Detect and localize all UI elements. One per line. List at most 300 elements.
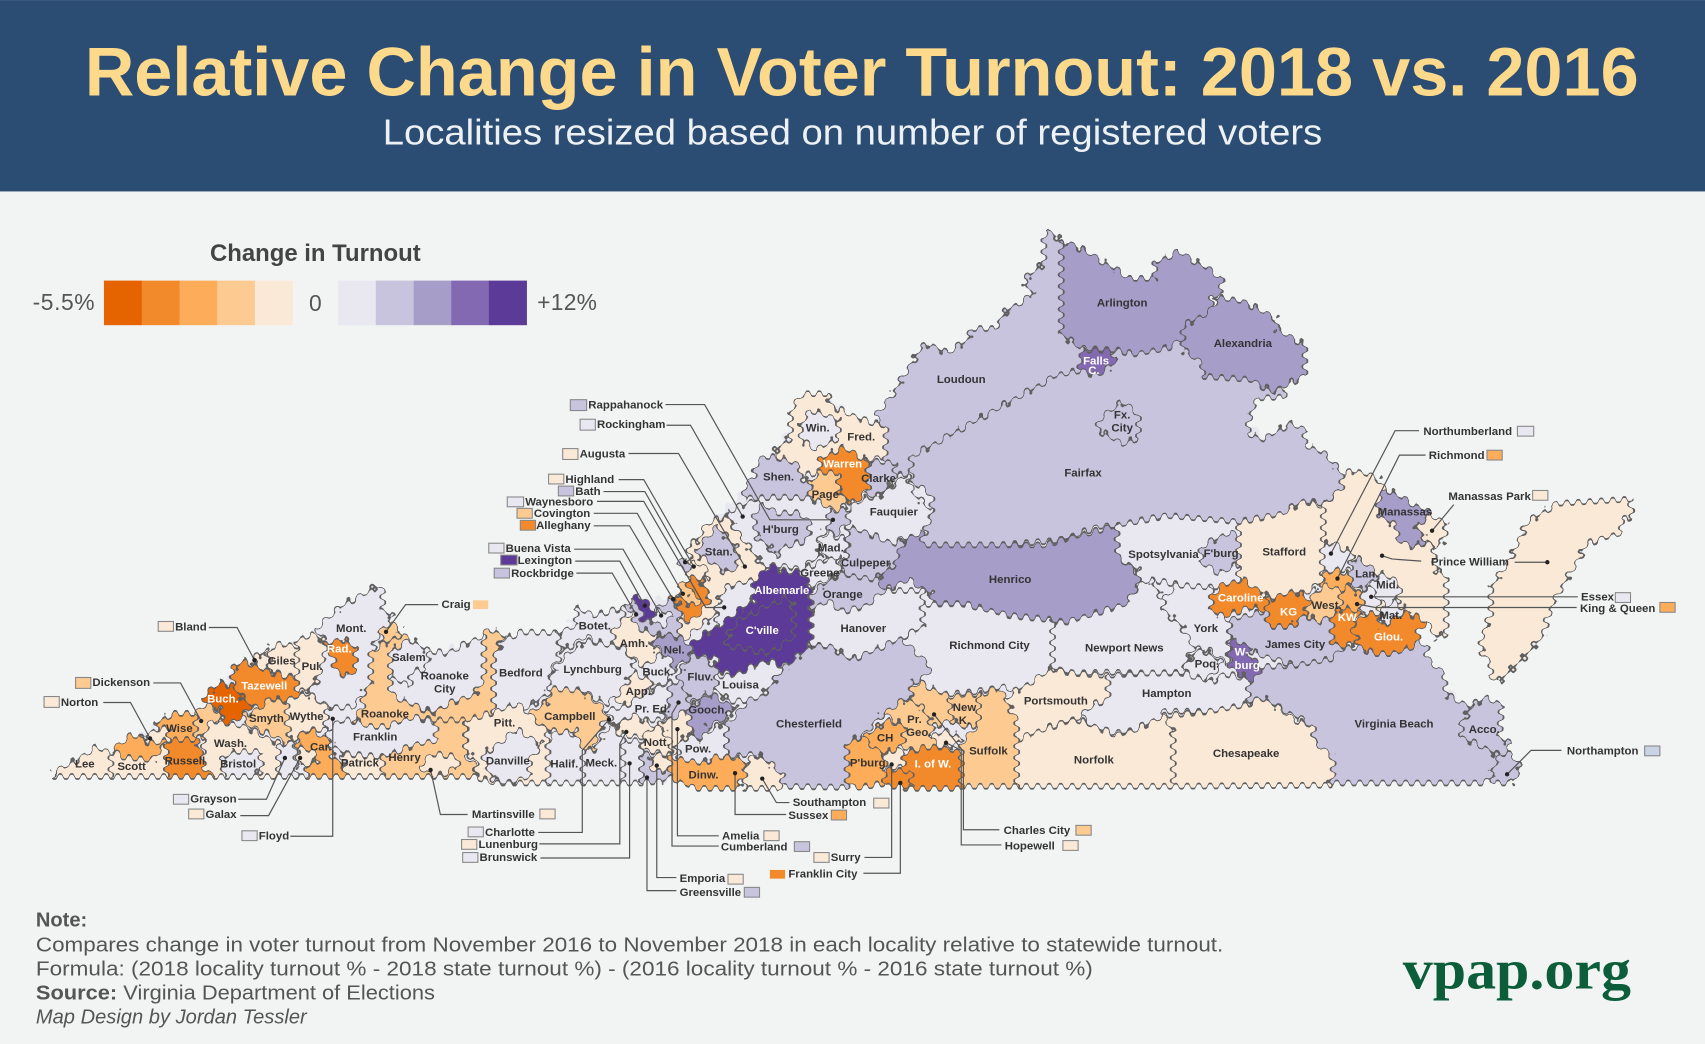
callout: Martinsville: Martinsville — [472, 809, 535, 821]
region name labels: Newport News — [1085, 642, 1164, 654]
callout: Waynesboro: Waynesboro — [525, 497, 593, 509]
region: Lee — [53, 747, 111, 776]
callout: Charlotte — [468, 717, 611, 839]
region: Middlesex — [1368, 573, 1401, 607]
callout: Franklin City — [770, 781, 903, 881]
region name labels: Fx. — [1114, 410, 1130, 422]
legend: change in turnout: 0 — [309, 290, 322, 316]
region: Augusta — [679, 515, 763, 644]
header banner — [0, 0, 1705, 191]
region: Surry — [885, 747, 905, 769]
region: Fairfax — [911, 338, 1342, 545]
legend: change in turnout: +12% — [537, 289, 597, 315]
region: Frederick — [772, 394, 886, 476]
region name labels: C. — [1088, 365, 1100, 377]
region: Nelson — [651, 633, 690, 670]
region name labels: Glou. — [1374, 632, 1403, 644]
region name labels: Pitt. — [494, 717, 515, 729]
callout: Lexington: Lexington — [518, 555, 572, 567]
callout: Essex: Essex — [1581, 591, 1615, 603]
region: Fredericksburg — [1200, 532, 1248, 573]
region name labels: Fairfax — [1064, 467, 1102, 479]
region name labels: Alexandria — [1214, 338, 1273, 350]
region: Galax — [297, 747, 318, 767]
region name labels: Richmond City — [949, 640, 1030, 652]
region name labels: Arlington — [1097, 298, 1148, 310]
region name labels: Shen. — [763, 472, 794, 484]
region name labels: Page — [812, 489, 839, 501]
region: Greene — [800, 557, 839, 587]
region: Page — [810, 472, 848, 513]
region name labels: H'burg — [763, 524, 799, 536]
region name labels: Fred. — [847, 431, 875, 443]
region: Roanoke — [354, 629, 503, 726]
callout: Rockbridge: Rockbridge — [511, 568, 574, 580]
region name labels: Salem — [392, 652, 426, 664]
region name labels: City — [434, 684, 456, 696]
region name labels: Pr. — [907, 714, 922, 726]
region: Manassas Park — [1416, 515, 1446, 547]
callout: Rockingham — [580, 419, 745, 519]
region name labels: Chesterfield — [776, 719, 842, 731]
region: Mecklenburg — [583, 726, 623, 783]
region: Buckingham — [644, 654, 673, 687]
region name labels: Buck. — [642, 666, 673, 678]
region name labels: Chesapeake — [1213, 748, 1279, 760]
region name labels: Dinw. — [689, 770, 719, 782]
region name labels: KW — [1338, 612, 1357, 624]
callout: Lexington — [501, 555, 647, 608]
region: Nottoway — [642, 725, 672, 755]
callout: Brunswick — [463, 761, 632, 864]
region: Lunenburg — [613, 713, 654, 737]
callout: Northumberland: Northumberland — [1423, 426, 1512, 438]
region name labels: Loudoun — [937, 374, 986, 386]
callout: Galax: Galax — [206, 809, 237, 821]
region name labels: Wise — [166, 723, 193, 735]
region: Prince George — [884, 698, 943, 750]
callout: Northumberland — [1329, 426, 1534, 556]
region name labels: Rad. — [327, 643, 352, 655]
region: Louisa — [717, 660, 783, 701]
region name labels: Henry — [388, 752, 421, 764]
region: Fairfax City — [1098, 402, 1138, 445]
region: Lynchburg — [548, 641, 634, 705]
region: Russell — [166, 739, 214, 776]
region: Chesterfield — [726, 638, 932, 787]
region: Greensville — [642, 754, 670, 782]
footnote: Formula: (2018 locality turnout % - 2018 state turnout %) - (2016 locality turnout % - 2016 state turnout %) — [36, 958, 1093, 980]
region name labels: Wythe — [290, 711, 324, 723]
region name labels: Mad. — [818, 542, 844, 554]
footnote — [36, 910, 1223, 1028]
callout: Greensville: Greensville — [680, 887, 741, 899]
callout: Manassas Park — [1430, 490, 1548, 533]
callout: Floyd — [242, 717, 335, 843]
region name labels — [75, 298, 1500, 782]
region name labels: Nel. — [664, 645, 685, 657]
region name labels: Amh. — [620, 638, 648, 650]
region: Caroline — [1211, 580, 1268, 617]
callout: Emporia: Emporia — [680, 873, 726, 885]
region name labels: Win. — [806, 423, 830, 435]
region name labels: Meck. — [585, 758, 617, 770]
region: Henrico — [875, 525, 1138, 622]
region: Isle of Wight — [903, 747, 961, 788]
callout: Grayson: Grayson — [190, 794, 237, 806]
region name labels: Lynchburg — [563, 664, 622, 676]
callout: Covington — [517, 508, 685, 596]
callout: Prince William — [1380, 554, 1550, 568]
region: Craig — [381, 622, 401, 644]
region: Southampton — [745, 754, 783, 788]
region: Colonial Heights — [864, 720, 905, 755]
region: Fluvanna — [679, 655, 717, 704]
footnote: Source: Virginia Department of Elections — [36, 982, 435, 1004]
callout: Northampton: Northampton — [1567, 746, 1639, 758]
region: Shenandoah — [744, 456, 810, 498]
region: York — [1163, 585, 1230, 663]
region name labels: Norfolk — [1074, 754, 1115, 766]
region: Emporia — [650, 753, 670, 772]
callout: Norton: Norton — [61, 697, 98, 709]
region name labels: Roanoke — [421, 671, 469, 683]
region name labels: burg — [1235, 660, 1260, 672]
callout: Sussex — [733, 771, 847, 822]
region name labels: Clarke — [861, 473, 896, 485]
callout: Martinsville — [428, 768, 555, 821]
region name labels: KG — [1280, 607, 1297, 619]
region: Waynesboro — [717, 580, 754, 626]
callout: Grayson — [173, 756, 287, 806]
region name labels: West. — [1311, 600, 1342, 612]
region name labels: Bristol — [220, 759, 256, 771]
callout: Buena Vista — [489, 543, 663, 618]
region: Wise — [111, 713, 196, 760]
callout: Alleghany: Alleghany — [536, 520, 591, 532]
callout: Charles City: Charles City — [1004, 825, 1071, 837]
region: Pittsylvania — [465, 704, 549, 783]
region name labels: Fluv. — [687, 672, 713, 684]
region name labels: Buch. — [207, 694, 239, 706]
callout: Craig — [384, 599, 488, 634]
title: Relative Change in Voter Turnout: 2018 vs. 2016 — [85, 34, 1639, 111]
region name labels: Stafford — [1262, 547, 1306, 559]
callout: Bath: Bath — [575, 486, 601, 498]
callout: Buena Vista: Buena Vista — [506, 543, 571, 555]
region name labels: Pow. — [685, 744, 711, 756]
region name labels: Portsmouth — [1024, 696, 1088, 708]
region: Rockbridge — [623, 597, 680, 641]
region name labels: Pr. Ed. — [635, 703, 670, 715]
region name labels: Fauquier — [870, 506, 918, 518]
region: Newport News — [1053, 580, 1194, 673]
region: King and Queen — [1341, 585, 1362, 613]
callout: Hopewell: Hopewell — [1005, 840, 1055, 852]
footnote: Note: — [36, 910, 87, 932]
region name labels: Hampton — [1142, 688, 1191, 700]
region name labels: Roanoke — [361, 709, 409, 721]
region: Bristol — [222, 751, 262, 776]
region name labels: C'ville — [746, 625, 779, 637]
region: Falls Church — [1080, 350, 1118, 375]
region: Northampton — [1491, 754, 1521, 783]
region name labels: Campbell — [544, 711, 595, 723]
region name labels: P'burg — [850, 758, 886, 770]
region: Albemarle — [690, 563, 811, 675]
region: Mathews — [1380, 601, 1408, 626]
region: Loudoun — [875, 231, 1082, 476]
region: Richmond City — [901, 604, 1054, 695]
region: Bedford — [494, 632, 559, 718]
region name labels: CH — [877, 733, 893, 745]
region: Alleghany — [670, 576, 710, 622]
callout: Sussex: Sussex — [788, 810, 829, 822]
region: Hopewell — [930, 730, 961, 747]
region: Prince William west — [1323, 470, 1446, 638]
callout: Highland — [549, 474, 696, 569]
callout: Cumberland: Cumberland — [721, 841, 788, 853]
region name labels: App. — [626, 686, 651, 698]
callout: King & Queen — [1355, 602, 1675, 615]
region: Grayson — [278, 741, 308, 776]
region: Madison — [819, 532, 848, 563]
region name labels: Spotsylvania — [1128, 549, 1199, 561]
region: Radford — [325, 638, 356, 676]
region: Tazewell — [232, 660, 299, 708]
region name labels: Car. — [310, 741, 332, 753]
callout: Waynesboro — [507, 497, 726, 610]
logo: vpap.org: vpap.org — [1403, 939, 1631, 1001]
region name labels: Mid. — [1376, 579, 1399, 591]
region name labels: Tazewell — [241, 680, 287, 692]
region: Fauquier — [847, 473, 932, 544]
region: Wythe — [287, 693, 327, 741]
region name labels: Nott. — [644, 737, 670, 749]
region: Botetourt — [558, 608, 623, 651]
region: Campbell — [530, 688, 607, 751]
region name labels: New — [953, 702, 976, 714]
region: Hampton — [1081, 673, 1248, 733]
region: Salem — [390, 638, 431, 687]
region: Chesapeake — [1163, 697, 1333, 786]
region: Spotsylvania — [1117, 515, 1240, 588]
region: Cumberland — [663, 682, 690, 720]
region: King George — [1267, 591, 1315, 626]
callout: Bath — [558, 486, 687, 564]
callout: Southampton — [760, 776, 889, 809]
region: Buchanan — [203, 682, 252, 723]
region name labels: Gooch. — [688, 704, 728, 716]
region name labels: Mat. — [1379, 610, 1402, 622]
callout: Rockbridge — [494, 568, 638, 617]
region: Patrick — [340, 754, 383, 776]
region name labels: Henrico — [989, 574, 1031, 586]
region name labels: F'burg — [1204, 548, 1239, 560]
region: Amelia — [660, 710, 690, 757]
region: Essex — [1360, 585, 1379, 617]
region: Brunswick — [623, 741, 642, 783]
callout: Craig: Craig — [441, 599, 471, 611]
callout: Northampton — [1505, 746, 1660, 776]
callout: Hopewell — [944, 741, 1078, 852]
region: Culpeper — [839, 526, 904, 580]
callout: Lunenburg: Lunenburg — [478, 839, 538, 851]
callouts: small locality leaders — [44, 399, 1675, 899]
region name labels: James City — [1265, 639, 1326, 651]
callout: Manassas Park: Manassas Park — [1448, 491, 1531, 503]
region name labels: Poq. — [1195, 659, 1219, 671]
region: Montgomery — [307, 584, 393, 708]
callout: Richmond — [1335, 450, 1502, 581]
region name labels: I. of W. — [915, 759, 951, 771]
region: Goochland — [688, 694, 736, 741]
region name labels: K. — [959, 715, 970, 727]
region: Covington — [679, 580, 700, 607]
callout: Cumberland — [672, 700, 810, 853]
region: Portsmouth — [1006, 669, 1108, 741]
region name labels: Lee — [75, 759, 95, 771]
region: Dickenson — [196, 704, 224, 739]
region name labels: Acco. — [1469, 724, 1500, 736]
region name labels: Falls — [1083, 355, 1109, 367]
region: Bland — [251, 650, 270, 671]
callout: Rappahanock: Rappahanock — [588, 399, 664, 411]
region: Rappahannock — [829, 509, 848, 536]
region name labels: Pul. — [302, 661, 323, 673]
callout: Bland — [158, 621, 257, 662]
region: Suffolk — [961, 687, 1017, 786]
region name labels: Patrick — [341, 758, 380, 770]
region: Franklin — [325, 717, 438, 757]
callout: Amelia: Amelia — [722, 831, 760, 843]
region: Alexandria — [1183, 297, 1305, 392]
callout: Rockingham: Rockingham — [597, 419, 665, 431]
region name labels: Halif. — [550, 759, 578, 771]
callout: Surry — [814, 762, 894, 864]
region: Harrisonburg — [754, 505, 811, 557]
callout: Dickenson — [76, 677, 203, 723]
region: Richmond County — [1322, 569, 1353, 591]
region name labels: Danville — [486, 755, 530, 767]
region: Orange — [811, 573, 885, 611]
region name labels: Russell — [165, 755, 205, 767]
region: Floyd — [325, 694, 368, 731]
callout: Galax — [189, 756, 302, 821]
region: Northumberland — [1322, 542, 1353, 573]
region name labels: Stan. — [705, 547, 733, 559]
callout: Charlotte: Charlotte — [485, 827, 535, 839]
callout: Southampton: Southampton — [793, 797, 866, 809]
region: Stafford — [1239, 500, 1323, 597]
region: Scott — [111, 746, 169, 776]
footnote: Compares change in voter turnout from November 2016 to November 2018 in each locality relative to statewide turnout. — [36, 935, 1223, 957]
region: Lancaster — [1351, 558, 1379, 591]
region: Washington — [203, 720, 279, 776]
region name labels: Orange — [823, 589, 863, 601]
callout: Surry: Surry — [831, 852, 861, 864]
callout: Dickenson: Dickenson — [92, 677, 150, 689]
region: Rockingham — [726, 497, 837, 570]
region name labels: Bedford — [499, 667, 543, 679]
region: Warren — [820, 447, 869, 504]
region name labels: City — [1111, 423, 1134, 435]
region name labels: Greene — [800, 567, 840, 579]
callout: Brunswick: Brunswick — [480, 852, 538, 864]
map underlay — [53, 361, 1517, 783]
region: Appomattox — [615, 673, 651, 707]
region: New Kent — [949, 694, 979, 729]
region: Clarke — [867, 460, 895, 498]
region: Dinwiddie and Sussex — [670, 757, 755, 788]
region: Westmoreland — [1305, 585, 1343, 622]
region: Williamsburg — [1230, 638, 1259, 682]
callout: Alleghany — [520, 520, 675, 601]
region: Smyth — [241, 698, 289, 745]
callout: Highland: Highland — [565, 474, 614, 486]
region: Norton — [141, 728, 169, 744]
region: Accomack — [1461, 697, 1511, 757]
region name labels: York — [1194, 623, 1219, 635]
region: Charles City — [911, 682, 951, 726]
region name labels: Geo. — [906, 727, 932, 739]
region name labels: Manassas — [1378, 506, 1432, 518]
legend: change in turnout: Change in Turnout — [210, 240, 421, 267]
callout: Prince William: Prince William — [1431, 556, 1509, 568]
callout: Augusta — [563, 448, 747, 569]
region: Giles — [270, 644, 299, 676]
callout: Lunenburg — [462, 730, 629, 851]
region name labels: Botet. — [579, 621, 611, 633]
region name labels: Culpeper — [841, 558, 891, 570]
region name labels: Caroline — [1218, 592, 1264, 604]
callout: King & Queen: King & Queen — [1580, 603, 1655, 615]
region: Franklin City — [884, 769, 911, 786]
legend: change in turnout — [33, 240, 597, 325]
legend: change in turnout: -5.5% — [33, 289, 95, 315]
region: Pulaski — [297, 633, 335, 692]
region: Charlottesville — [726, 597, 794, 654]
callout: Richmond: Richmond — [1429, 450, 1485, 462]
region: James City — [1230, 610, 1343, 666]
callout: Norton — [44, 697, 152, 741]
region: Danville — [484, 730, 542, 783]
region: Highland — [688, 562, 709, 580]
region name labels: Albemarle — [754, 585, 809, 597]
callout: Essex — [1369, 591, 1631, 603]
region: Henry — [383, 720, 476, 776]
region name labels: Louisa — [722, 679, 760, 691]
region: Carroll — [297, 730, 345, 776]
callout: Franklin City: Franklin City — [788, 869, 858, 881]
region name labels: W- — [1235, 647, 1249, 659]
region: Gloucester — [1351, 612, 1428, 654]
region name labels: Warren — [823, 459, 862, 471]
region: Martinsville — [419, 754, 458, 776]
callout: Covington: Covington — [534, 508, 590, 520]
region name labels: Giles — [268, 655, 296, 667]
region: Powhatan — [676, 720, 726, 763]
callout: Emporia — [655, 763, 743, 885]
callout: Floyd: Floyd — [259, 831, 289, 843]
region: Buena Vista — [654, 610, 672, 626]
callout: Amelia — [675, 727, 779, 843]
region: Bath — [679, 557, 690, 571]
callout: Greensville — [645, 775, 760, 899]
region name labels: Scott — [117, 761, 146, 773]
subtitle: Localities resized based on number of registered voters — [383, 113, 1322, 153]
region: Prince Edward — [607, 682, 670, 726]
